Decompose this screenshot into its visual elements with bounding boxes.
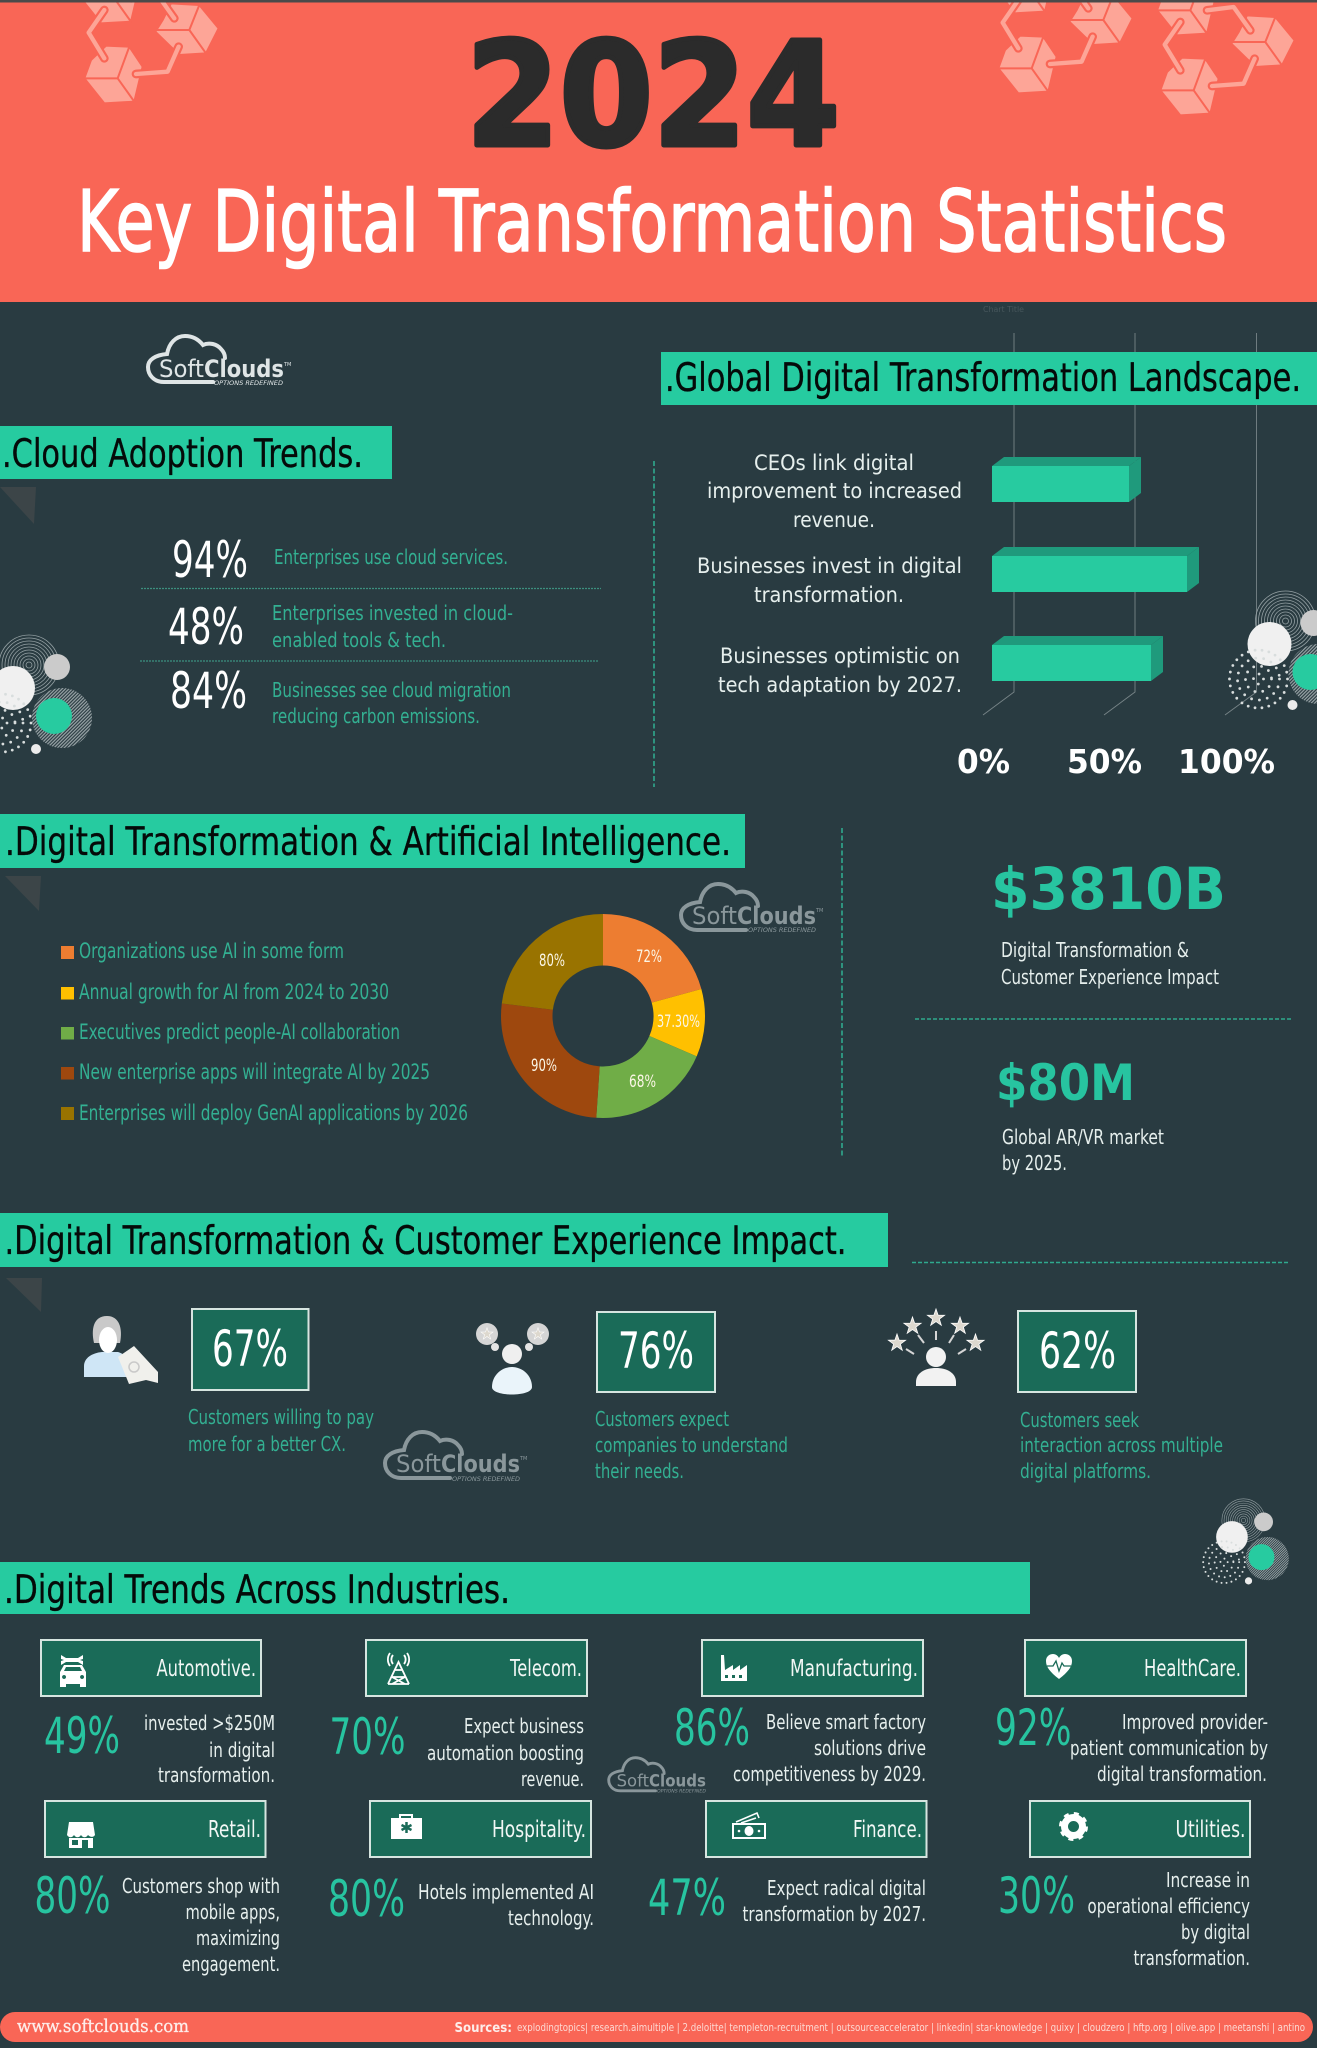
text: willing to pay: more for a better CX. [188,1432,346,1456]
logo: SoftClouds AI section [681,884,823,934]
text: AR/VR market [1002,1125,1164,1175]
category labels: tech adaptation by 2027. [718,673,962,697]
card: hospitality: technology. [508,1906,594,1930]
text: multiple platforms: interaction across multiple [1020,1433,1223,1457]
card: finance: Finance. [853,1817,922,1843]
axis labels: 0% [957,742,1010,781]
card: hospitality: 80% [328,1870,405,1928]
website: www.softclouds.com [17,2016,189,2037]
category labels: improvement to increased [707,479,962,503]
card: retail: Customers shop with [122,1874,280,1898]
logo: SoftClouds industries section: Soft [617,1772,649,1792]
icon: medical case [391,1815,422,1839]
stat: 84 percent: 84% [170,662,247,720]
stat: 84 percent [170,662,511,728]
decorative chain right 2 [1157,0,1295,115]
card: automotive: transformation. [158,1763,275,1787]
logo: SoftClouds customer section: Clouds [441,1450,520,1478]
legend: Annual growth for AI from 2024 to 2030 [79,980,389,1004]
stat: 48 percent: Enterprises invested in cloud- [272,601,513,625]
logo: SoftClouds customer section [385,1432,527,1483]
text: customer experience impact: Digital Transformation & [1001,938,1189,962]
card: retail: engagement. [182,1952,280,1976]
section heading: industries [0,1562,1030,1614]
footer bar [0,2012,1313,2042]
legend: Executives predict people-AI collaboration [79,1020,400,1044]
stat: 94 percent [172,531,508,589]
logo: SoftClouds top: OPTIONS REDEFINED [214,380,283,387]
icon: person with stars [888,1309,984,1386]
card: finance [648,1801,926,1927]
section heading: cloud adoption: .Cloud Adoption Trends. [2,432,363,477]
card: hospitality: Hotels implemented AI [418,1880,594,1904]
section heading: AI [0,814,745,868]
text: understand needs: Customers expect [595,1407,729,1431]
stat: 80M: $80M [996,1054,1135,1112]
card: manufacturing: 86% [674,1699,750,1757]
faint chart title: Chart Title [983,305,1024,314]
axis labels: 100% [1178,742,1275,781]
stat box: 76 percent [597,1312,715,1392]
card: automotive: 49% [44,1707,120,1765]
card: telecom: revenue. [521,1767,584,1791]
card: healthcare: HealthCare. [1144,1656,1241,1682]
card: telecom: 70% [330,1708,406,1766]
text: customer experience impact [1001,938,1219,989]
category labels: transformation. [754,583,904,607]
logo: SoftClouds customer section: OPTIONS REDEFINED [452,1476,520,1483]
stat: 3810B: $3810B [991,855,1226,923]
card: retail: Retail. [208,1817,261,1843]
icon: gear [1060,1814,1086,1840]
card: telecom: automation boosting [427,1741,584,1765]
text: multiple platforms: digital platforms. [1020,1459,1151,1483]
stat box: 62 percent [1018,1311,1136,1392]
donut chart: 68% [629,1072,656,1092]
legend: Organizations use AI in some form [79,939,344,963]
legend [61,939,468,1125]
logo: SoftClouds top [148,336,291,387]
panel: digital transformation and AI [0,814,823,1125]
legend: Enterprises will deploy GenAI applications by 2026 [79,1101,468,1125]
text: willing to pay [188,1405,374,1456]
decorative circles left [0,635,92,754]
decorative corner triangle [6,1278,42,1312]
panel: customer experience impact [0,1213,1290,1483]
decorative corner triangle [5,876,41,911]
logo: SoftClouds industries section [609,1758,707,1794]
year title: 2024 [466,11,840,179]
decorative corner triangle [0,487,36,524]
logo: SoftClouds top: Soft [159,355,204,383]
card: utilities: by digital [1181,1920,1250,1944]
stat box: 67 percent [192,1309,308,1390]
card: utilities: 30% [998,1867,1075,1925]
icon: person with card [84,1316,158,1384]
logo: SoftClouds customer section: Soft [396,1450,441,1478]
card: healthcare: digital transformation. [1097,1762,1267,1786]
card: utilities [998,1801,1250,1970]
card: manufacturing: solutions drive [814,1736,926,1760]
text: understand needs: companies to understand [595,1433,788,1457]
card: telecom: Telecom. [509,1656,582,1682]
panel: cloud adoption trends [0,426,601,754]
category labels: CEOs link digital [754,451,914,475]
card: manufacturing: competitiveness by 2029. [733,1762,926,1786]
card: finance: Expect radical digital [767,1876,926,1900]
logo: SoftClouds top: TM [283,362,291,368]
legend: New enterprise apps will integrate AI by 2025 [79,1060,430,1084]
category labels: Businesses optimistic on [720,644,960,668]
axis labels [957,742,1275,781]
header banner [0,0,1317,302]
card: retail [34,1801,280,1976]
stat: 84 percent: reducing carbon emissions. [272,704,480,728]
card: automotive: invested >$250M [144,1711,275,1735]
text: willing to pay: Customers willing to pay [188,1405,374,1429]
text: multiple platforms: Customers seek [1020,1408,1139,1432]
donut chart [501,914,705,1118]
text: understand needs [595,1407,788,1483]
stat box: 62 percent: 62% [1039,1322,1116,1380]
panel: digital trends across industries [0,1562,1268,1976]
stat: 94 percent: Enterprises use cloud services. [274,545,508,569]
logo: SoftClouds AI section: TM [815,908,823,914]
card: automotive: in digital [209,1738,275,1762]
card: manufacturing: Believe smart factory [766,1710,926,1734]
text: AR/VR market: Global AR/VR market [1002,1125,1164,1149]
decorative chain left [81,0,219,103]
donut chart: 90% [531,1056,557,1076]
icon: money [733,1813,765,1838]
stat: 48 percent: 48% [168,598,244,656]
logo: SoftClouds industries section: OPTIONS REDEFINED [657,1788,707,1794]
card: automotive: Automotive. [156,1656,256,1682]
card: manufacturing: Manufacturing. [790,1656,918,1682]
icon: factory [721,1655,747,1681]
category labels [697,451,962,697]
card: utilities: Increase in [1166,1868,1250,1892]
card: utilities: Utilities. [1176,1817,1246,1843]
donut chart: 37.30% [657,1012,700,1032]
text: multiple platforms [1020,1408,1223,1483]
bar: businesses invest [992,547,1199,592]
stat box: 76 percent: 76% [618,1322,694,1380]
panel: market value stats [915,855,1293,1175]
donut chart: 80% [539,951,565,971]
text: understand needs: their needs. [595,1459,684,1483]
icon: signal tower [388,1653,409,1684]
axis labels: 50% [1067,742,1142,781]
card: retail: 80% [34,1867,110,1925]
stat: 48 percent [168,598,513,656]
card: retail: maximizing [196,1926,280,1950]
bar: CEOs [992,457,1141,502]
text: AR/VR market: by 2025. [1002,1151,1067,1175]
stat: 84 percent: Businesses see cloud migration [272,678,511,702]
logo: SoftClouds AI section: Soft [692,902,737,930]
logo: SoftClouds AI section: OPTIONS REDEFINED [748,927,816,934]
card: utilities: transformation. [1134,1946,1250,1970]
card: hospitality [328,1801,594,1930]
logo: SoftClouds customer section: TM [519,1456,527,1462]
logo: SoftClouds top: Clouds [204,355,284,383]
icon: car and wrench [60,1655,86,1687]
chart: global digital transformation landscape [661,305,1317,781]
sources: Sources: [454,2020,512,2036]
section heading: customer experience: .Digital Transformation & Customer Experience Impact. [4,1219,846,1264]
section heading: industries: .Digital Trends Across Industries. [4,1568,510,1613]
donut chart: 72% [636,947,662,967]
stat box: 67 percent: 67% [212,1320,288,1378]
card: retail: mobile apps, [186,1900,280,1924]
decorative circles right [1230,591,1317,710]
card: automotive [41,1640,275,1787]
category labels: revenue. [793,508,875,532]
card: healthcare: 92% [995,1699,1072,1757]
card: healthcare: Improved provider- [1122,1710,1268,1734]
card: hospitality: Hospitality. [492,1817,586,1843]
icon: person with ratings [476,1323,549,1394]
text: customer experience impact: Customer Experience Impact [1001,965,1219,989]
logo: SoftClouds AI section: Clouds [737,902,816,930]
card: telecom [330,1640,587,1791]
logo: SoftClouds industries section: Clouds [649,1772,706,1792]
category labels: Businesses invest in digital [697,554,962,578]
card: finance: 47% [648,1869,726,1927]
stat: 94 percent: 94% [172,531,248,589]
decorative chain right 1 [995,0,1133,93]
bar: businesses optimistic [992,636,1163,681]
card: telecom: Expect business [464,1714,584,1738]
icon: heart [1046,1654,1072,1679]
icon: store [67,1822,95,1848]
card: manufacturing [674,1640,926,1786]
section heading: AI: .Digital Transformation & Artificial Intelligence. [5,820,731,865]
card: healthcare [995,1640,1268,1786]
card: utilities: operational efficiency [1088,1894,1250,1918]
decorative circles lower right [1203,1499,1289,1584]
stat: 48 percent: enabled tools & tech. [272,628,446,652]
card: finance: transformation by 2027. [742,1902,926,1926]
